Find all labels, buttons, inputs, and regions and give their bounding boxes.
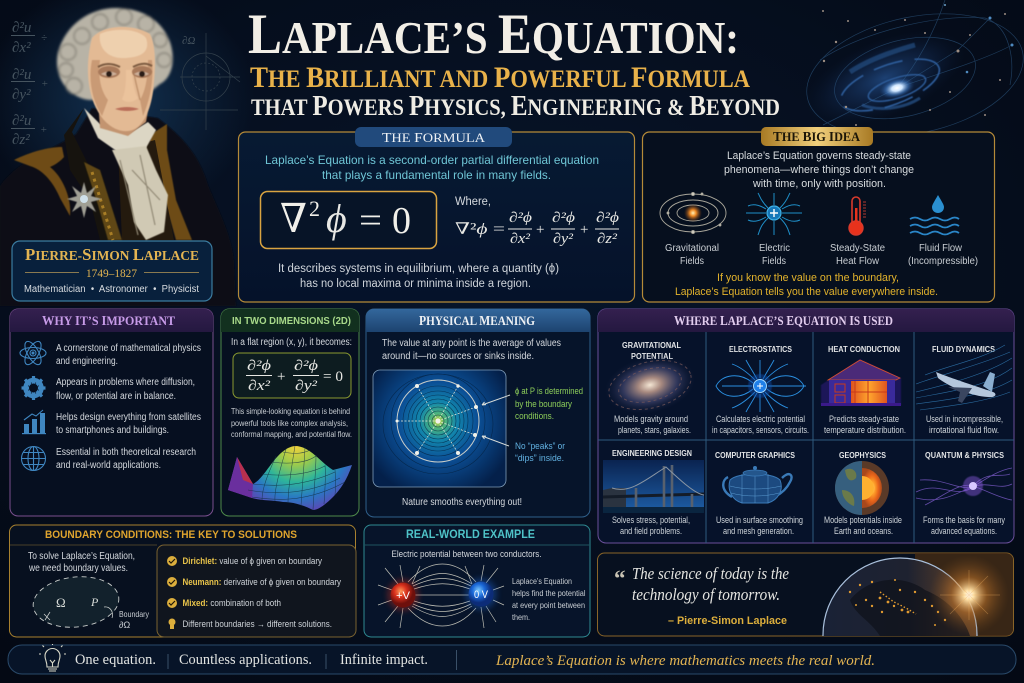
icon: bar chart	[22, 410, 46, 434]
example text: Laplace’s Equation	[512, 576, 572, 586]
icon labels: Electric	[759, 243, 790, 254]
cell: fluid dynamics	[916, 344, 1012, 435]
main equation box: 0	[392, 200, 411, 242]
cell: fluid dynamics: FLUID DYNAMICS	[932, 344, 995, 354]
reasons text: and real-world applications.	[56, 460, 161, 471]
cell: geophysics	[824, 450, 902, 536]
boundary list text: Mixed: combination of both	[182, 598, 281, 608]
title line 1: LAPLACE’S EQUATION:	[248, 3, 739, 66]
where expansion: Where,	[455, 196, 491, 208]
cell: fluid dynamics: irrotational fluid flow.	[929, 425, 999, 435]
2D text: powerful tools like complex analysis,	[231, 418, 348, 428]
earth illustration	[822, 553, 1013, 636]
2D equation box: = 0	[323, 369, 343, 385]
formula intro	[265, 153, 599, 182]
ghost math formulas: +	[40, 124, 47, 136]
reasons text: to smartphones and buildings.	[56, 425, 169, 436]
panel: why it's important	[10, 309, 213, 516]
callout: no peaks or dips: No “peaks” or	[515, 441, 565, 452]
cell: electrostatics: ELECTROSTATICS	[729, 344, 792, 354]
cell: gravitational potential: POTENTIAL	[631, 351, 673, 361]
callout: no peaks or dips	[515, 441, 565, 464]
big idea text: phenomena—where things don’t change	[724, 164, 914, 176]
2D text: This simple-looking equation is behind	[231, 406, 350, 416]
cell: gravitational potential: GRAVITATIONAL	[622, 340, 681, 350]
boundary list text: Neumann: derivative of ϕ given on boundary	[182, 577, 341, 587]
boundary list	[157, 545, 356, 637]
big idea text	[724, 150, 914, 190]
where expansion: ∂z²	[597, 231, 618, 247]
cell: quantum and physics: advanced equations.	[931, 526, 997, 536]
callout: boundary conditions: conditions.	[515, 411, 554, 422]
eyes	[98, 64, 152, 78]
icon: thermometer	[849, 197, 866, 235]
portrait of Pierre-Simon Laplace	[0, 0, 255, 306]
positive conductor: +V	[396, 590, 411, 602]
tagline: Laplace’s Equation is where mathematics meets the real world.	[495, 653, 875, 669]
roles: Mathematician • Astronomer • Physicist	[24, 284, 199, 295]
callout: boundary conditions	[515, 386, 583, 422]
equilibrium text: It describes systems in equilibrium, where a quantity (ϕ)	[278, 263, 559, 275]
heading: WHY IT’S IMPORTANT	[42, 313, 175, 328]
2D equation box	[233, 353, 351, 398]
reasons text: and engineering.	[56, 356, 118, 367]
icon labels: Gravitational	[665, 243, 719, 254]
cell: heat conduction: HEAT CONDUCTION	[828, 344, 900, 354]
where expansion: ∂x²	[510, 231, 531, 247]
big idea conclusion: Laplace’s Equation tells you the value everywhere inside.	[675, 286, 938, 298]
callout: no peaks or dips: “dips” inside.	[515, 453, 564, 464]
ghost circle diagram: ∂Ω	[182, 35, 195, 47]
domain diagram: ∂Ω	[119, 620, 130, 630]
cell: computer graphics	[715, 450, 803, 536]
where expansion: ∂y²	[553, 231, 574, 247]
cell: gravitational potential: planets, stars, galaxies.	[618, 425, 691, 435]
icon: electric field	[746, 193, 802, 235]
arrow: boundary conditions	[482, 395, 510, 405]
example text: helps find the potential	[512, 588, 586, 598]
icon labels: Steady-State	[830, 243, 885, 254]
field diagram	[378, 564, 504, 628]
where expansion: ∂²ϕ	[596, 210, 620, 226]
boundary list text	[182, 556, 341, 629]
formula intro: Laplace’s Equation is a second-order partial differential equation	[265, 153, 599, 167]
ghost math formulas: ∂x²	[12, 40, 31, 56]
dates: 1749–1827	[86, 268, 137, 280]
heading: PHYSICAL MEANING	[419, 313, 535, 328]
cell: heat conduction	[821, 344, 906, 435]
ghost math formulas: ∂²u	[12, 113, 31, 129]
cell: geophysics: GEOPHYSICS	[839, 450, 886, 460]
example text: them.	[512, 612, 530, 622]
icon labels: Fluid Flow	[919, 243, 963, 254]
order star	[67, 182, 102, 218]
2D text	[231, 406, 352, 439]
contour diagram	[373, 370, 506, 487]
heading: BOUNDARY CONDITIONS: THE KEY TO SOLUTIONS	[45, 529, 297, 541]
icon: light bulb	[39, 644, 66, 671]
cell: engineering design: Solves stress, potential,	[612, 515, 690, 525]
epaulette	[14, 147, 70, 216]
where expansion: ∂²ϕ	[552, 210, 576, 226]
2D equation box: ∂y²	[295, 378, 318, 394]
boundary intro: To solve Laplace’s Equation,	[28, 551, 135, 562]
name: PIERRE-SIMON LAPLACE	[25, 245, 199, 264]
ghost math formulas	[11, 20, 48, 148]
domain diagram: P	[90, 595, 99, 609]
icon: atom	[20, 339, 46, 367]
panel: the formula	[238, 127, 634, 302]
title line 3: THAT POWERS PHYSICS, ENGINEERING & BEYOND	[251, 91, 780, 122]
equilibrium text: has no local maxima or minima inside a region.	[300, 278, 531, 290]
big idea conclusion	[675, 272, 938, 298]
example text	[512, 576, 586, 622]
grounded conductor: 0 V	[474, 589, 489, 601]
quote text: The science of today is the	[632, 564, 789, 583]
cell: quantum and physics	[916, 450, 1012, 536]
formula badge: THE FORMULA	[382, 130, 486, 146]
icon: gear	[22, 376, 46, 400]
cell: heat conduction: Predicts steady-state	[829, 414, 899, 424]
icon labels	[665, 243, 978, 267]
icon: globe	[22, 446, 46, 471]
big idea badge: THE BIG IDEA	[773, 129, 860, 144]
heading: IN TWO DIMENSIONS (2D)	[232, 315, 351, 327]
big idea text: Laplace’s Equation governs steady-state	[727, 150, 911, 162]
ghost math formulas: +	[41, 78, 48, 90]
title line 2: THE BRILLIANT AND POWERFUL FORMULA	[250, 61, 750, 94]
intro	[382, 338, 561, 362]
big idea text: with time, only with position.	[752, 178, 886, 190]
callout: boundary conditions: ϕ at P is determined	[515, 386, 583, 397]
heading: REAL-WORLD EXAMPLE	[406, 529, 535, 541]
panel: boundary conditions	[10, 525, 356, 637]
domain diagram: Boundary	[119, 609, 150, 619]
slogan: One equation.	[75, 652, 156, 668]
surface plot	[228, 446, 352, 510]
icon: checks	[167, 556, 177, 608]
cell: engineering design: ENGINEERING DESIGN	[612, 448, 692, 458]
ghost math formulas: ∂²u	[12, 20, 31, 36]
cell: geophysics: Earth and oceans.	[834, 526, 893, 536]
icon labels: Fields	[762, 256, 786, 267]
attribution: – Pierre-Simon Laplace	[668, 615, 787, 627]
icon labels: Fields	[680, 256, 704, 267]
coat	[0, 108, 236, 306]
name card	[12, 241, 212, 301]
where expansion	[455, 196, 620, 247]
ghost math formulas: ∂y²	[12, 87, 31, 103]
cell: computer graphics: Used in surface smoothing	[716, 515, 803, 525]
domain diagram	[31, 573, 150, 631]
cell: engineering design: and field problems.	[620, 526, 682, 536]
reasons text: flow, or potential are in balance.	[56, 391, 176, 402]
slogan	[75, 652, 428, 668]
2D equation box: ∂²ϕ	[247, 358, 272, 374]
caption: Nature smooths everything out!	[402, 497, 522, 508]
reasons text	[56, 343, 201, 471]
example intro: Electric potential between two conductors.	[392, 549, 542, 560]
boundary intro: we need boundary values.	[28, 563, 128, 574]
intro: In a flat region (x, y), it becomes:	[231, 337, 352, 348]
intro: The value at any point is the average of values	[382, 338, 561, 349]
cell: engineering design	[603, 448, 704, 536]
big idea badge	[761, 127, 873, 146]
right lapel	[150, 124, 192, 240]
icon: water drop and waves	[910, 195, 959, 234]
icon labels: Heat Flow	[836, 256, 880, 267]
ghost circle diagram	[160, 33, 240, 130]
where expansion: +	[536, 222, 544, 238]
cell: electrostatics: in capacitors, sensors, circuits.	[712, 425, 809, 435]
title	[248, 3, 780, 122]
main equation box	[260, 192, 436, 248]
slogan: Countless applications.	[179, 652, 312, 668]
2D equation box: ∂x²	[248, 378, 271, 394]
cell: fluid dynamics: Used in incompressible,	[926, 414, 1003, 424]
cell: heat conduction: temperature distribution.	[824, 425, 906, 435]
quotation mark: “	[614, 566, 626, 591]
mouth	[115, 107, 139, 111]
2D text: conformal mapping, and potential flow.	[231, 429, 352, 439]
2D equation box: ∂²ϕ	[294, 358, 319, 374]
neck and face	[88, 27, 155, 136]
ghost math formulas: ∂²u	[12, 67, 31, 83]
waistcoat	[118, 140, 174, 240]
cell: quantum and physics: QUANTUM & PHYSICS	[925, 450, 1004, 460]
quote text	[632, 564, 789, 604]
panel: where Laplace's equation is used	[598, 309, 1014, 543]
icon labels: (Incompressible)	[908, 256, 978, 267]
where expansion: ∂²ϕ	[509, 210, 533, 226]
galaxy illustration	[792, 0, 1024, 155]
panel: real-world example	[364, 525, 590, 637]
cell: gravitational potential: Models gravity around	[614, 414, 688, 424]
main equation box: ∇	[280, 196, 307, 241]
panel: in two dimensions	[221, 309, 359, 516]
arrow: no peaks	[482, 436, 509, 446]
icon: small bulb	[168, 618, 176, 629]
cell: gravitational potential	[599, 340, 701, 435]
where expansion: ∇² ϕ =	[455, 221, 505, 238]
boundary intro	[28, 551, 135, 574]
panel: physical meaning	[366, 309, 590, 517]
heading: WHERE LAPLACE’S EQUATION IS USED	[674, 313, 893, 328]
main equation box: 2	[309, 196, 320, 221]
formula intro: that plays a fundamental role in many fields.	[322, 168, 551, 182]
intro: around it—no sources or sinks inside.	[382, 351, 534, 362]
formula badge	[355, 127, 512, 147]
reasons text: Appears in problems where diffusion,	[56, 377, 195, 388]
cell: computer graphics: and mesh generation.	[723, 526, 794, 536]
example text: at every point between	[512, 600, 585, 610]
main equation box: ϕ	[326, 196, 347, 241]
boundary list text: Dirichlet: value of ϕ given on boundary	[182, 556, 322, 566]
boundary list text: Different boundaries → different solutions.	[182, 619, 332, 629]
cell: electrostatics	[712, 344, 809, 435]
equilibrium text	[278, 263, 559, 290]
left collar embroidery	[64, 108, 120, 240]
big idea conclusion: If you know the value on the boundary,	[717, 272, 899, 284]
reasons text: A cornerstone of mathematical physics	[56, 343, 201, 354]
callout: boundary conditions: by the boundary	[515, 399, 572, 410]
icon: gravitational orbits	[660, 192, 726, 234]
2D equation box: +	[277, 369, 285, 385]
slogan: Infinite impact.	[340, 652, 428, 668]
reasons text: Helps design everything from satellites	[56, 412, 201, 423]
quote text: technology of tomorrow.	[632, 585, 780, 604]
cell: geophysics: Models potentials inside	[824, 515, 902, 525]
bottom banner	[8, 644, 1016, 674]
reasons text: Essential in both theoretical research	[56, 447, 196, 458]
panel: the big idea	[642, 127, 994, 302]
panel: quote	[597, 552, 1014, 636]
cell: quantum and physics: Forms the basis for many	[923, 515, 1005, 525]
where expansion: +	[580, 222, 588, 238]
ghost math formulas: ∂z²	[12, 132, 30, 148]
ghost math formulas: ÷	[41, 32, 47, 44]
main equation box: =	[359, 200, 382, 240]
domain diagram: Ω	[56, 595, 66, 610]
wig	[57, 8, 173, 100]
cell: computer graphics: COMPUTER GRAPHICS	[715, 450, 795, 460]
cell: electrostatics: Calculates electric potential	[716, 414, 805, 424]
cravat	[84, 108, 156, 152]
